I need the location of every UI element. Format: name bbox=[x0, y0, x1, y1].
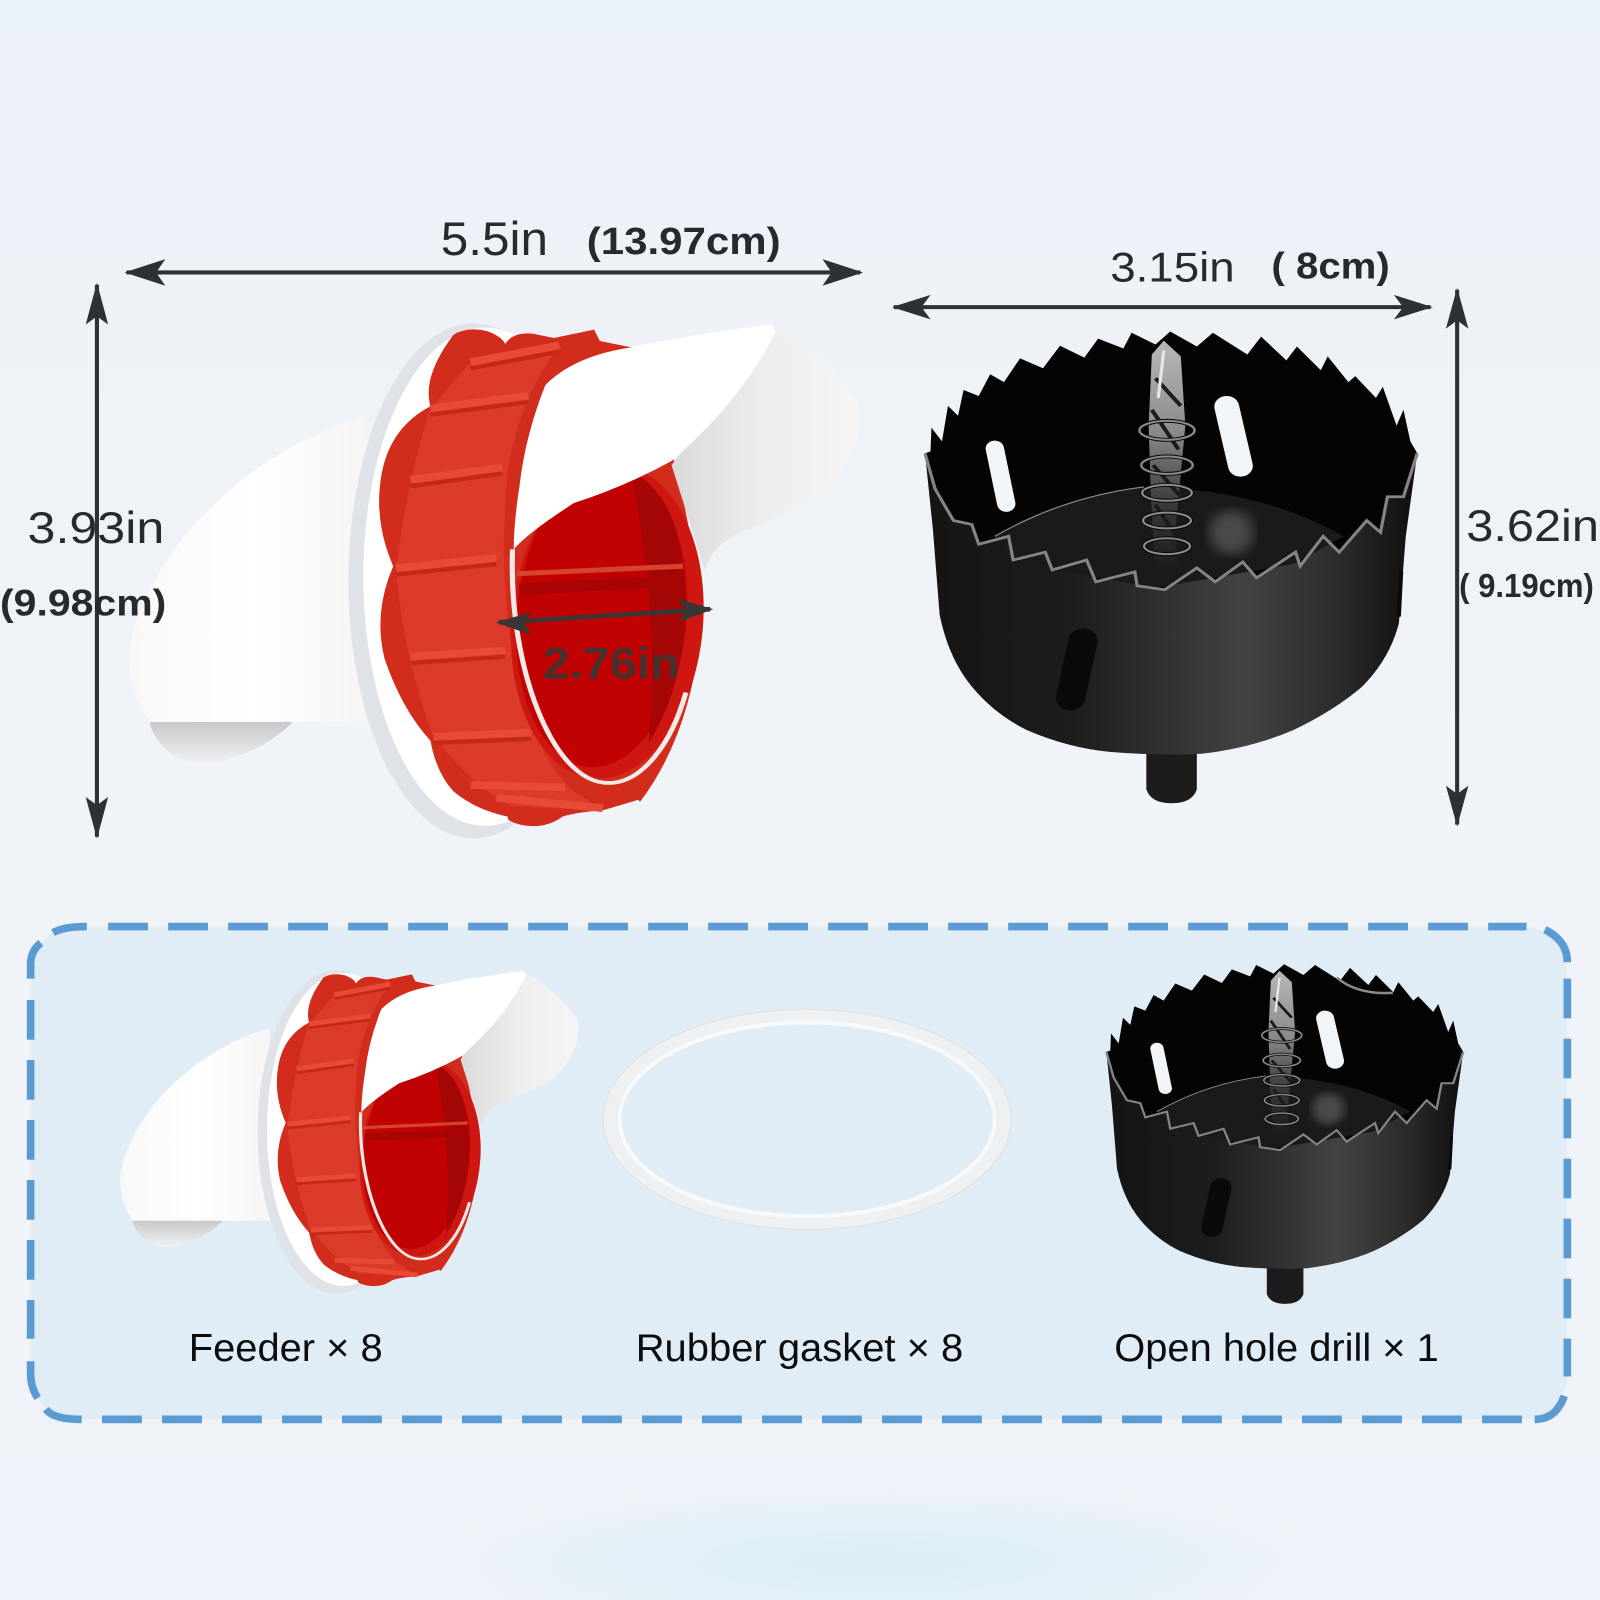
label: feeder height: 3.93in bbox=[28, 502, 164, 553]
label: feeder height: (9.98cm) bbox=[0, 582, 166, 623]
feeder tube bbox=[129, 415, 379, 722]
inner slots bbox=[995, 407, 1240, 504]
label: saw width bbox=[1110, 244, 1390, 291]
caption: feeder: Feeder × 8 bbox=[189, 1327, 383, 1370]
arrow: feeder height bbox=[86, 283, 108, 839]
caption: rubber gasket: Rubber gasket × 8 bbox=[636, 1327, 963, 1370]
flange bbox=[348, 323, 607, 839]
label: feeder height bbox=[0, 502, 166, 623]
drill bit bbox=[1149, 341, 1185, 572]
tube opening bbox=[150, 722, 293, 764]
feeder illustration (large) bbox=[129, 323, 859, 839]
front teeth edge bbox=[925, 453, 1417, 590]
caption: open hole drill: Open hole drill × 1 bbox=[1114, 1327, 1439, 1370]
rubber gasket bbox=[603, 1009, 1011, 1230]
cylinder body bbox=[925, 453, 1417, 754]
ribbed band bbox=[396, 345, 603, 810]
label: saw width: 3.15in bbox=[1110, 244, 1235, 291]
arrow: saw width bbox=[892, 295, 1433, 319]
arrow: feeder width bbox=[124, 259, 863, 286]
inner red disc bbox=[500, 462, 714, 783]
label: feeder width bbox=[441, 213, 781, 265]
hole saw illustration (large) bbox=[925, 332, 1417, 803]
label: feeder width: 5.5in bbox=[441, 213, 548, 265]
shank bbox=[1146, 742, 1197, 803]
label: saw height: 3.62in bbox=[1466, 500, 1599, 551]
floor of the saw bbox=[995, 487, 1344, 588]
label: saw width: ( 8cm) bbox=[1271, 246, 1390, 287]
small hole saw bbox=[1106, 964, 1463, 1304]
interior with teeth bbox=[925, 332, 1417, 590]
label: saw height bbox=[1459, 500, 1599, 605]
small feeder bbox=[120, 970, 579, 1294]
front slots bbox=[1071, 572, 1401, 698]
label: opening diameter: 2.76in bbox=[543, 638, 680, 689]
arrow: saw height bbox=[1446, 288, 1468, 827]
scalloped red collar bbox=[379, 329, 703, 826]
label: feeder width: (13.97cm) bbox=[587, 220, 781, 262]
arrow: opening diameter bbox=[496, 599, 713, 635]
panel: package contents bbox=[31, 927, 1567, 1419]
hood front bbox=[514, 324, 776, 549]
hood back bbox=[672, 326, 859, 570]
spring bbox=[1139, 421, 1195, 554]
